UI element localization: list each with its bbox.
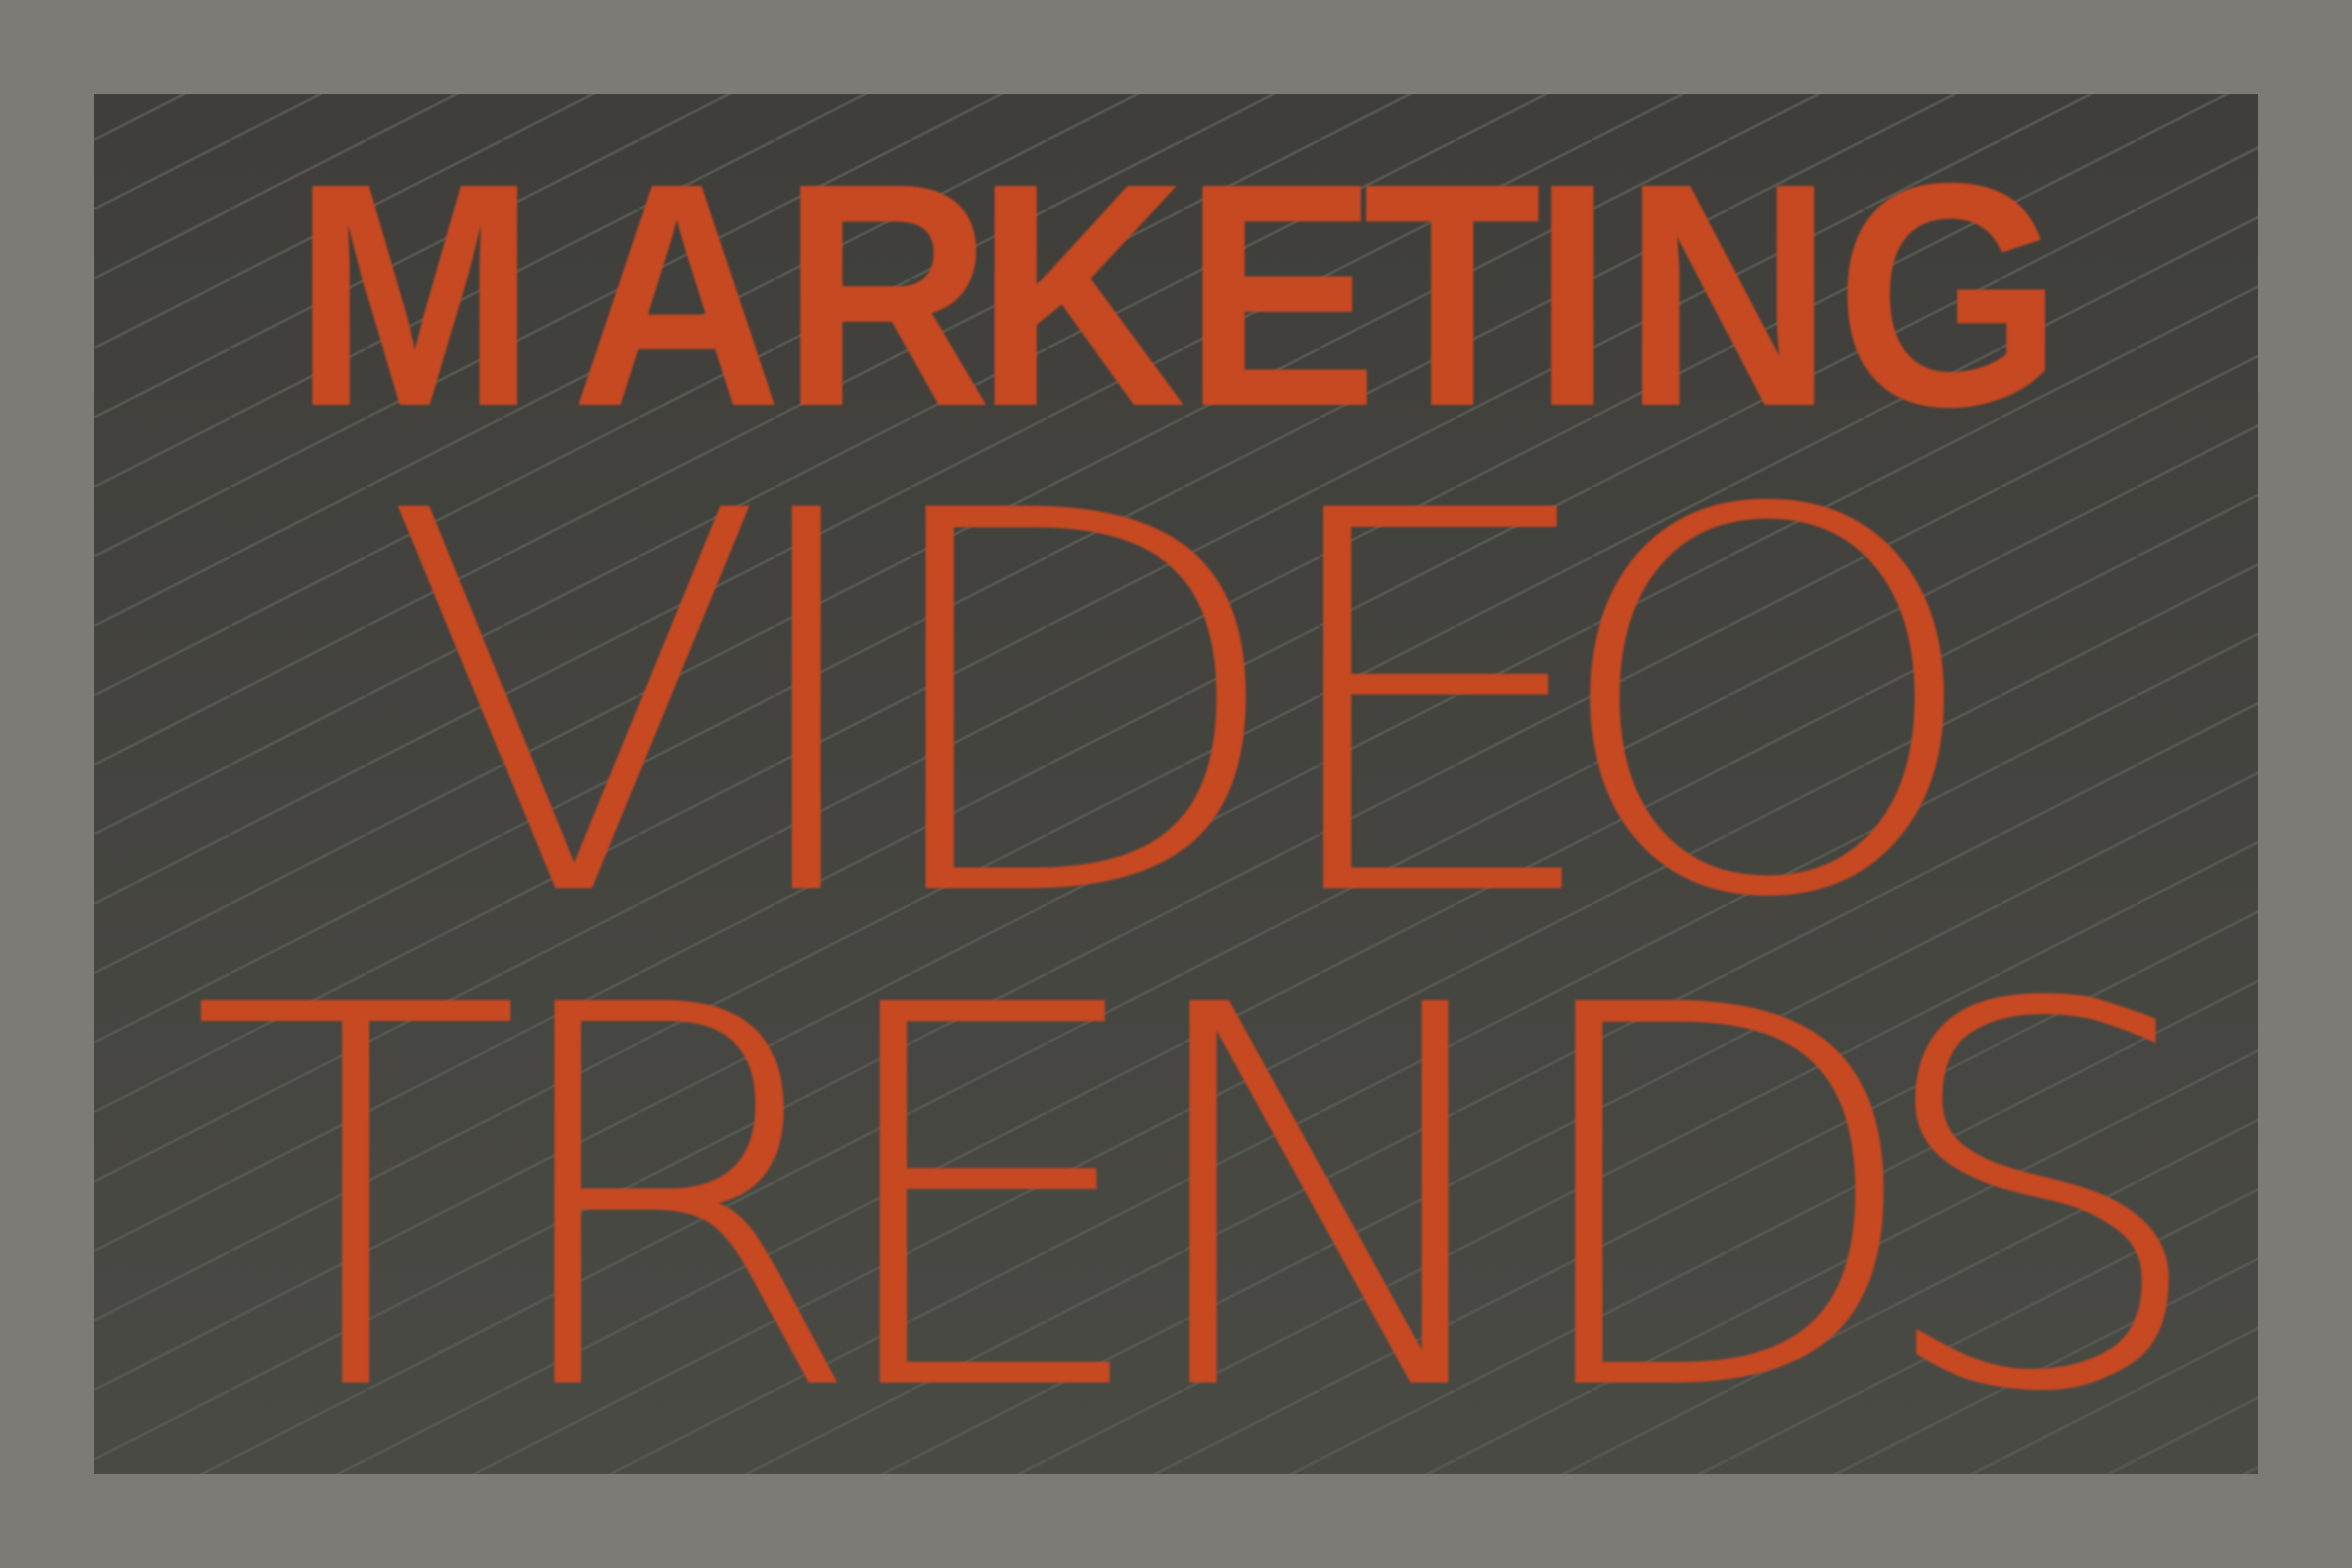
heading: VIDEO: VIDEO	[381, 401, 1990, 1013]
heading: TRENDS: TRENDS	[189, 896, 2213, 1506]
heading: MARKETING: MARKETING	[292, 118, 2063, 473]
